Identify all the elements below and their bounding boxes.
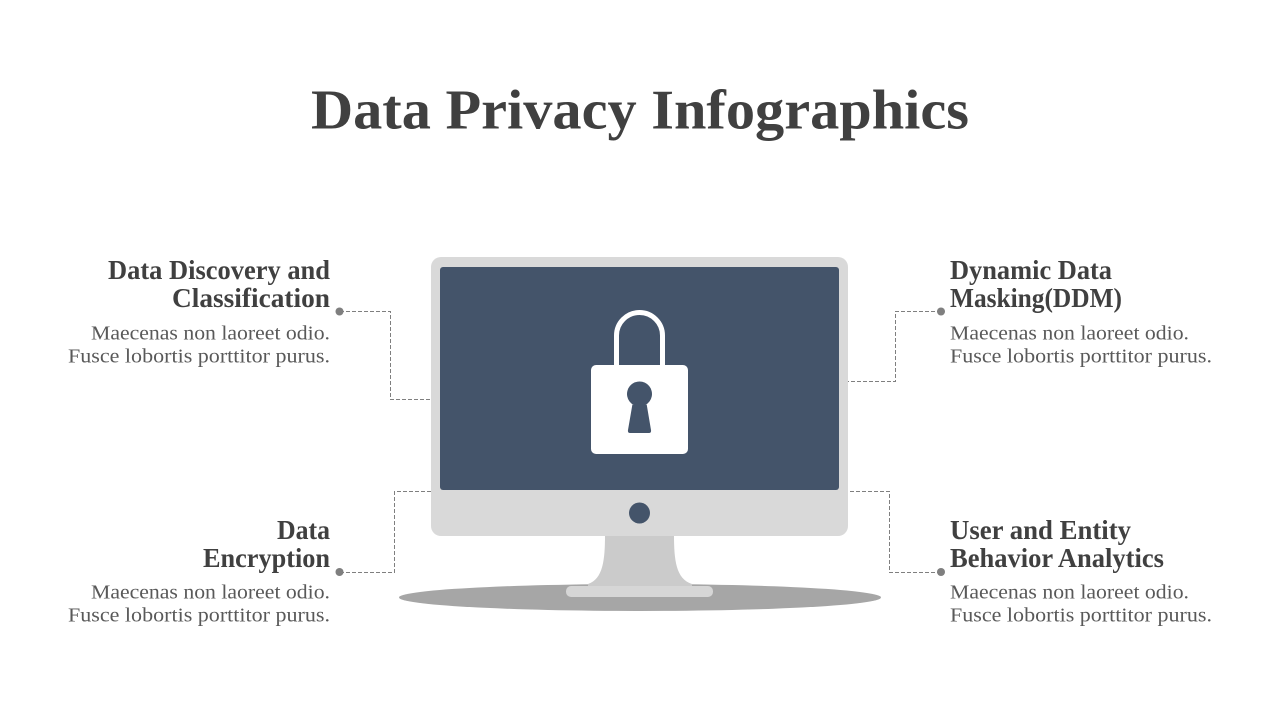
heading: Dynamic Data	[950, 255, 1112, 285]
body text	[950, 582, 1212, 627]
heading	[950, 515, 1164, 573]
connector: bottom right	[848, 492, 945, 576]
panel: user and entity behavior analytics	[950, 515, 1212, 627]
heading: Masking(DDM)	[950, 283, 1122, 313]
stand shadow	[399, 584, 881, 611]
heading: Behavior Analytics	[950, 543, 1164, 573]
body text: Fusce lobortis porttitor purus.	[68, 346, 330, 368]
heading: Data	[277, 515, 330, 545]
heading	[108, 255, 330, 313]
panel: dynamic data masking	[950, 255, 1212, 368]
heading: Encryption	[203, 543, 330, 573]
heading: Data Discovery and	[108, 255, 330, 285]
heading: Classification	[172, 283, 330, 313]
heading	[203, 515, 330, 573]
power button	[629, 502, 650, 524]
connector: top left	[336, 308, 431, 400]
heading	[950, 255, 1122, 313]
body text: Fusce lobortis porttitor purus.	[68, 605, 330, 627]
body text	[950, 322, 1212, 368]
title: Data Privacy Infographics	[311, 80, 969, 142]
panel: data discovery and classification	[68, 255, 330, 368]
monitor body	[431, 257, 848, 536]
body text: Maecenas non laoreet odio.	[950, 582, 1189, 604]
stand neck	[588, 535, 692, 590]
body text	[68, 582, 330, 627]
body text: Maecenas non laoreet odio.	[91, 322, 330, 344]
panel: data encryption	[68, 515, 330, 627]
connector: bottom left	[336, 492, 431, 576]
stand base	[566, 586, 713, 597]
body text: Maecenas non laoreet odio.	[950, 322, 1189, 344]
icon: desktop monitor with padlock	[399, 257, 881, 611]
body text: Fusce lobortis porttitor purus.	[950, 346, 1212, 368]
body text	[68, 322, 330, 368]
heading: User and Entity	[950, 515, 1131, 545]
icon: padlock	[591, 312, 688, 454]
screen	[440, 267, 839, 490]
body text: Maecenas non laoreet odio.	[91, 582, 330, 604]
body text: Fusce lobortis porttitor purus.	[950, 605, 1212, 627]
connector: top right	[848, 308, 945, 382]
